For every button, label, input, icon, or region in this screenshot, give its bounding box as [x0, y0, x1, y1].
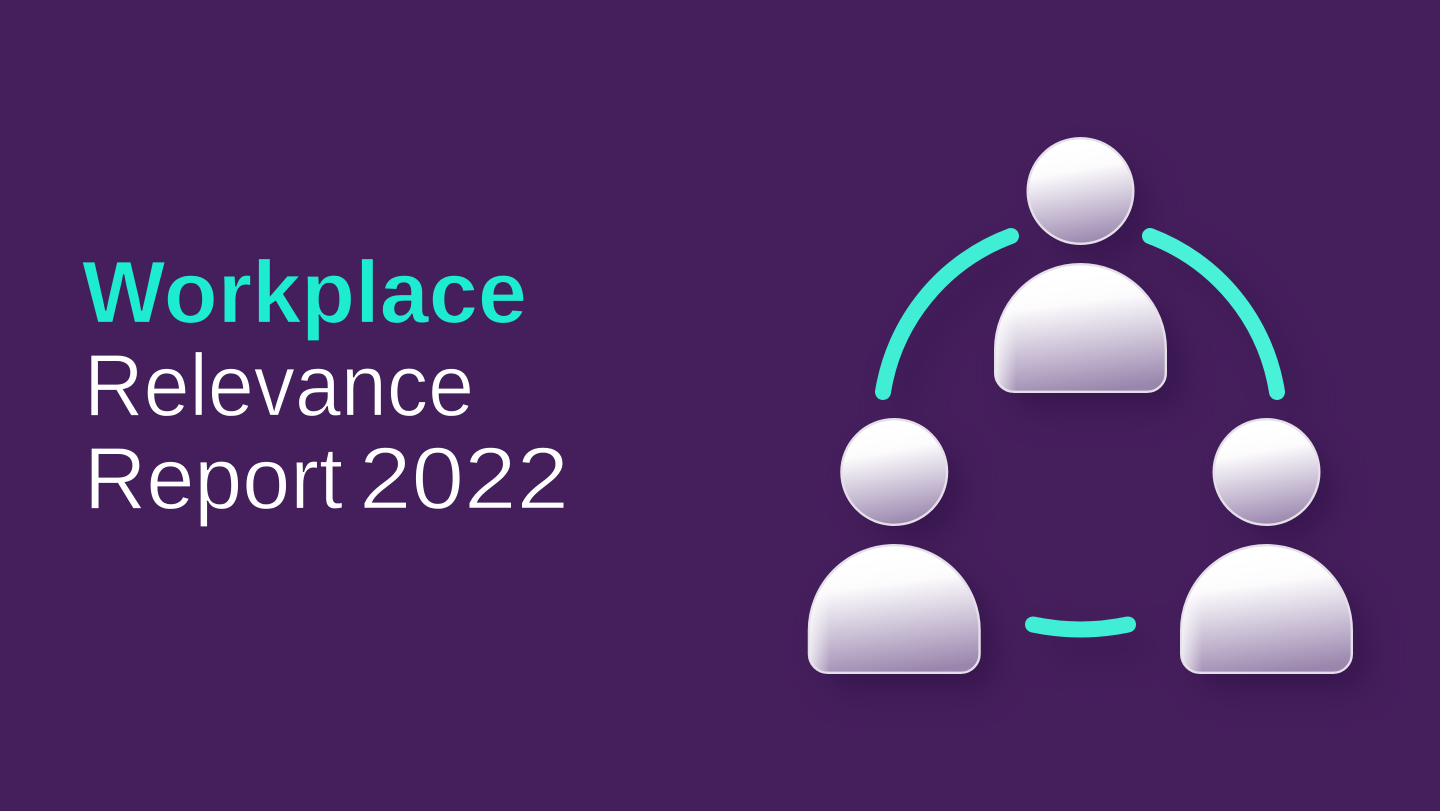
connector arc: top left	[883, 236, 1011, 392]
person: bottom left	[809, 419, 980, 673]
title line: Workplace: Workplace	[82, 242, 527, 342]
person: bottom right	[1181, 419, 1352, 673]
head	[1028, 138, 1133, 244]
connector arc: bottom	[1033, 624, 1128, 629]
title line: 2022: 2022	[359, 428, 569, 528]
title line: Relevance: Relevance	[84, 336, 474, 434]
person: top	[995, 138, 1166, 392]
body	[809, 545, 980, 673]
body edge glow	[1182, 546, 1351, 672]
soft shadows	[828, 159, 1368, 690]
title	[82, 242, 569, 528]
title line: Report: Report	[84, 428, 343, 528]
connector arc: top right	[1150, 236, 1277, 392]
head	[1214, 419, 1319, 525]
body edge glow	[810, 546, 979, 672]
body	[1181, 545, 1352, 673]
body	[995, 264, 1166, 392]
icon: three connected people	[809, 138, 1368, 690]
head	[841, 419, 947, 525]
body edge glow	[996, 265, 1165, 391]
